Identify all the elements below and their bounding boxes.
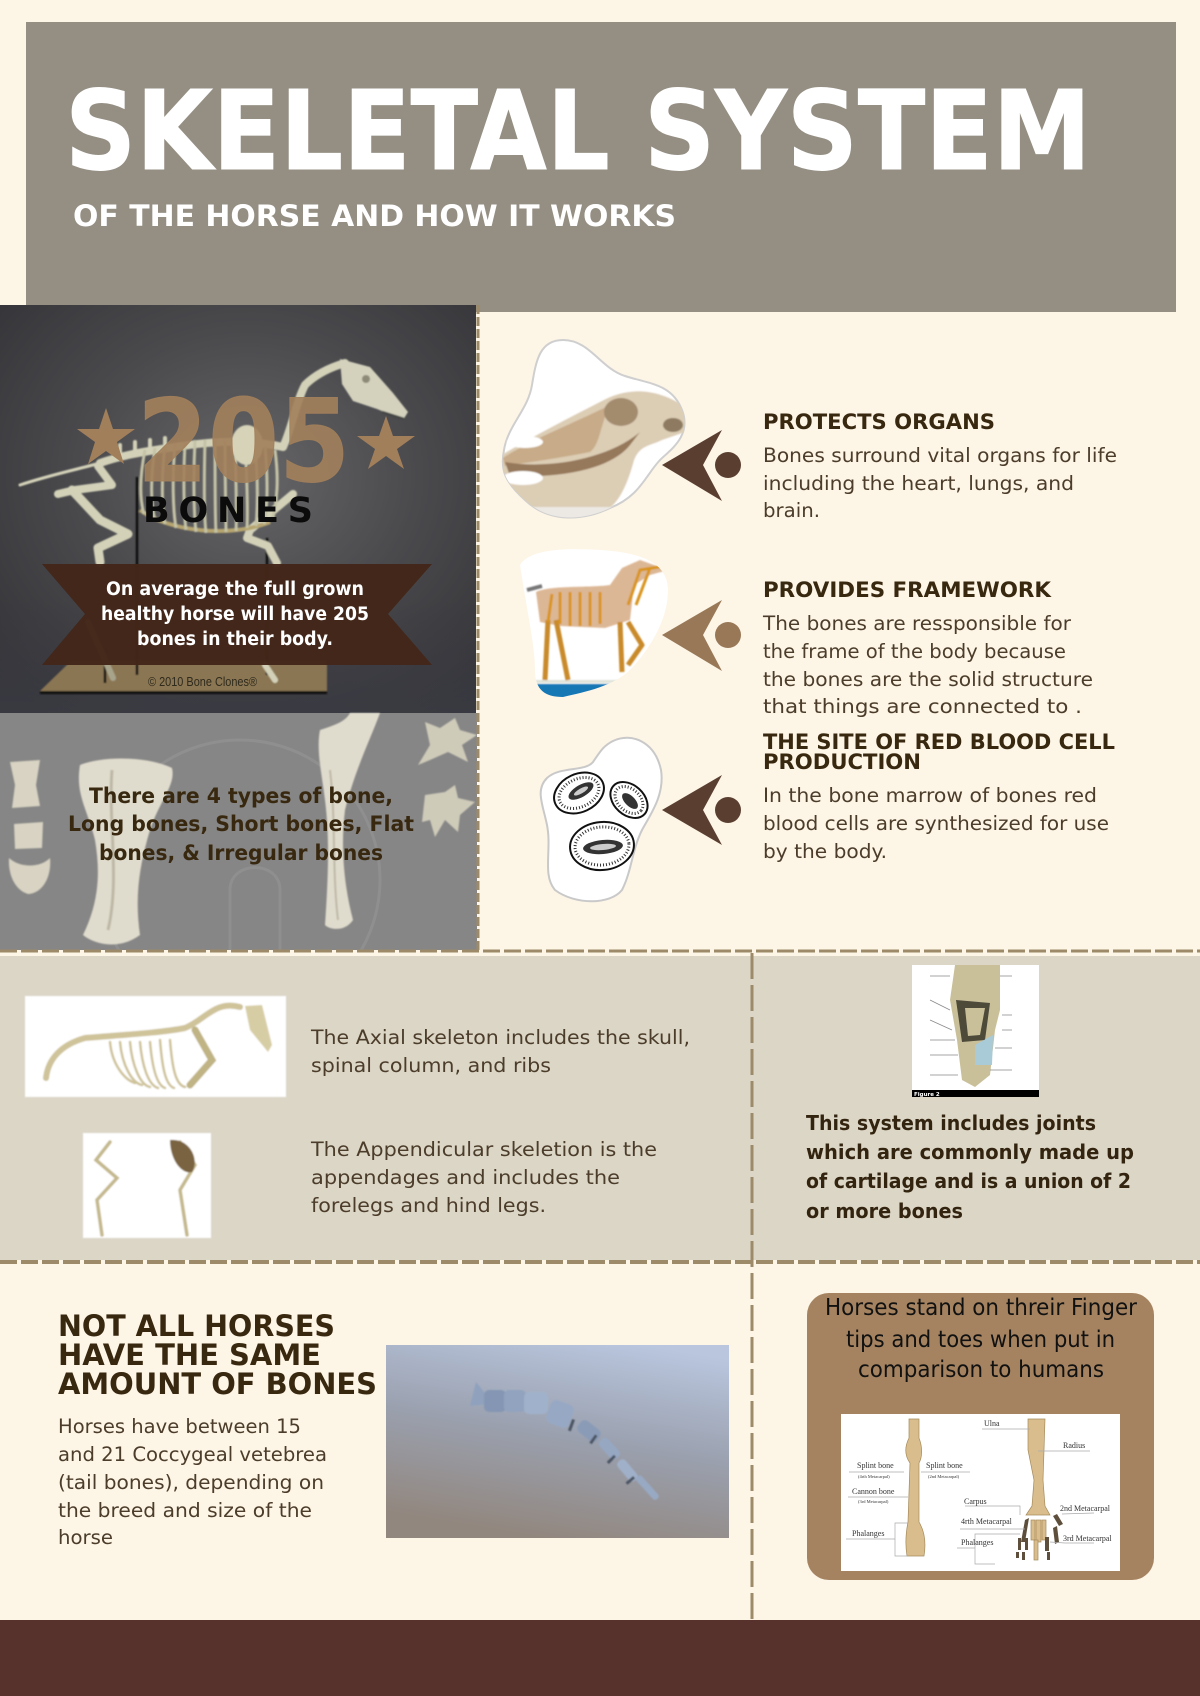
image: horse and human foreleg: (3rd Metacarpal): [858, 1499, 889, 1504]
ribbon callout: On average the full grown: [106, 579, 364, 600]
text: red blood cell production: PRODUCTION: [763, 750, 921, 775]
ribbon callout: bones in their body.: [137, 629, 333, 650]
icon: red blood cell blob: [541, 738, 662, 901]
heading: not all horses: HAVE THE SAME: [58, 1338, 321, 1372]
text: provides framework: the bones are the solid structure: [763, 668, 1093, 691]
text: provides framework: the frame of the body because: [763, 640, 1066, 663]
number 205: 205: [137, 375, 350, 508]
ribbon callout: [42, 564, 432, 665]
text: There are 4 types of bone,: [89, 784, 393, 809]
image: horse and human foreleg: Splint bone: [857, 1461, 894, 1470]
text: [68, 784, 414, 866]
header banner: [26, 22, 1176, 312]
text: red blood cell production: by the body.: [763, 840, 887, 863]
vertebrae: [418, 718, 477, 837]
short bones: [9, 760, 50, 894]
image: horse and human foreleg: (4rth Metacarpal): [858, 1474, 890, 1479]
icon: left star: [77, 408, 135, 464]
text: red blood cell production: blood cells are synthesized for use: [763, 812, 1109, 835]
image: horse and human foreleg: Phalanges: [852, 1529, 884, 1538]
text: provides framework: The bones are ressponsible for: [762, 612, 1072, 635]
skeleton photo: [20, 359, 408, 694]
text: joints: which are commonly made up: [806, 1140, 1134, 1164]
image: horse and human foreleg: 3rd Metacarpal: [1063, 1534, 1112, 1543]
image: tail bones: [386, 1345, 729, 1538]
text: protects organs: [763, 410, 1117, 522]
card text: [825, 1295, 1137, 1383]
title: SKELETAL SYSTEM: [65, 67, 1091, 195]
card: finger tips comparison: [807, 1293, 1154, 1580]
text: joints: of cartilage and is a union of 2: [806, 1169, 1131, 1193]
text: axial: [310, 1026, 690, 1077]
image: horse and human foreleg: 2nd Metacarpal: [1060, 1504, 1111, 1513]
text: coccygeal vertebrae: and 21 Coccygeal vetebrea: [58, 1443, 327, 1466]
text: coccygeal vertebrae: [58, 1415, 327, 1549]
panel: skeleton divisions: [0, 956, 1200, 1260]
heading: not all horses: AMOUNT OF BONES: [58, 1367, 377, 1401]
text: bones, & Irregular bones: [99, 841, 383, 866]
icon: arrow 3: [662, 775, 741, 845]
card text: tips and toes when put in: [846, 1327, 1115, 1353]
photo credit: © 2010 Bone Clones®: [148, 675, 258, 689]
image: appendicular skeleton: [83, 1133, 211, 1238]
icon: horse blob: [520, 549, 668, 700]
card text: comparison to humans: [858, 1357, 1104, 1383]
text: red blood cell production: In the bone marrow of bones red: [763, 784, 1097, 807]
long bones: [79, 713, 380, 944]
text: red blood cell production: [763, 730, 1115, 863]
text: provides framework: [762, 578, 1093, 718]
bones label: BONES: [143, 491, 313, 531]
image: axial skeleton: [25, 996, 286, 1097]
text: protects organs: including the heart, lungs, and: [763, 472, 1074, 495]
image: hock joint diagram: [912, 965, 1039, 1098]
text: joints: or more bones: [806, 1199, 963, 1223]
image: horse and human foreleg: Splint bone: [926, 1461, 963, 1470]
panel: 205 bones: [0, 305, 476, 713]
ribbon callout: healthy horse will have 205: [101, 604, 369, 625]
text: joints: [806, 1111, 1134, 1223]
icon: right star: [357, 416, 415, 469]
image: horse and human foreleg: Carpus: [964, 1497, 987, 1506]
icon: arrow 1: [662, 430, 741, 501]
text: appendicular: [310, 1138, 657, 1217]
text: coccygeal vertebrae: the breed and size of the: [58, 1499, 312, 1522]
icon: arrow 2: [662, 600, 741, 671]
image: horse and human foreleg: Cannon bone: [852, 1487, 895, 1496]
text: axial: spinal column, and ribs: [311, 1054, 551, 1077]
text: Long bones, Short bones, Flat: [68, 812, 414, 837]
text: appendicular: The Appendicular skeletion is the: [310, 1138, 657, 1161]
image: horse and human foreleg: [841, 1414, 1120, 1571]
text: provides framework: that things are connected to .: [763, 695, 1082, 718]
text: protects organs: brain.: [763, 499, 820, 522]
text: coccygeal vertebrae: (tail bones), depending on: [58, 1471, 324, 1494]
panel: types of bone: [0, 712, 477, 950]
text: protects organs: Bones surround vital organs for life: [763, 444, 1117, 467]
text: protects organs: PROTECTS ORGANS: [763, 410, 995, 435]
text: appendicular: forelegs and hind legs.: [311, 1194, 546, 1217]
text: axial: The Axial skeleton includes the skull,: [310, 1026, 690, 1049]
text: provides framework: PROVIDES FRAMEWORK: [763, 578, 1052, 603]
icon: skull blob: [500, 340, 690, 522]
text: coccygeal vertebrae: horse: [58, 1526, 113, 1549]
card text: Horses stand on threir Finger: [825, 1295, 1137, 1321]
footer bar: [0, 1620, 1200, 1696]
heading: not all horses: [58, 1309, 377, 1401]
image: horse and human foreleg: Ulna: [984, 1419, 1000, 1428]
text: joints: This system includes joints: [806, 1111, 1096, 1135]
subtitle: OF THE HORSE AND HOW IT WORKS: [73, 199, 676, 233]
text: coccygeal vertebrae: Horses have between 15: [58, 1415, 301, 1438]
image: horse and human foreleg: 4rth Metacarpal: [961, 1517, 1013, 1526]
heading: not all horses: NOT ALL HORSES: [58, 1309, 335, 1343]
image: hock joint diagram: Figure 2: [914, 1092, 940, 1098]
text: red blood cell production: THE SITE OF RED BLOOD CELL: [763, 730, 1115, 755]
image: horse and human foreleg: Radius: [1063, 1441, 1085, 1450]
image: horse and human foreleg: Phalanges: [961, 1538, 993, 1547]
text: appendicular: appendages and includes the: [311, 1166, 620, 1189]
image: horse and human foreleg: (2nd Metacarpal): [928, 1474, 960, 1479]
